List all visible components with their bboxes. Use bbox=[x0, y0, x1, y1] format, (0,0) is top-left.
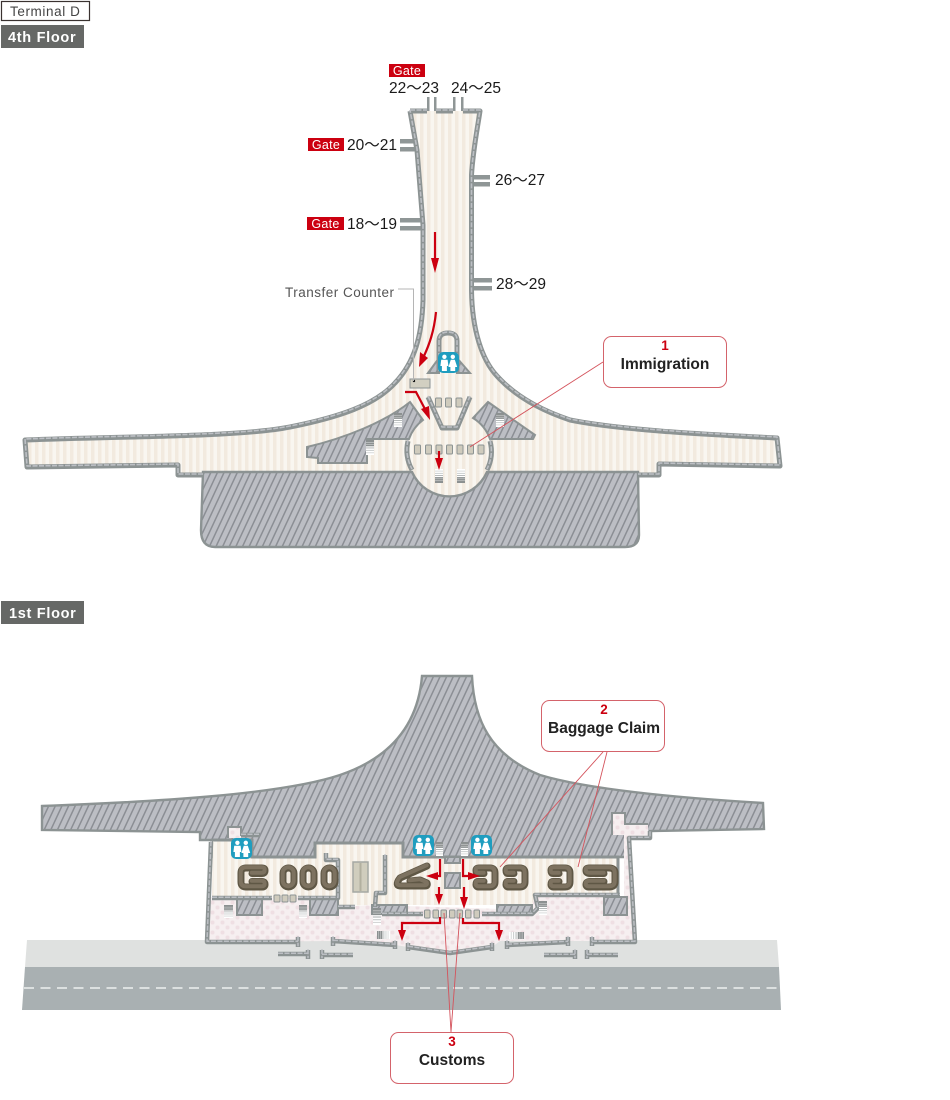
arrow bbox=[419, 312, 436, 367]
arrow bbox=[463, 859, 480, 880]
callout: baggage claim: 2 bbox=[600, 702, 608, 717]
terminal label: Terminal D bbox=[10, 4, 81, 19]
gate label 18-19: Gate bbox=[311, 217, 340, 231]
icon: restroom bbox=[231, 838, 252, 859]
arrivals hall bbox=[207, 838, 636, 955]
terminal label bbox=[2, 2, 90, 20]
concourse floor bbox=[25, 111, 780, 500]
stairs bbox=[366, 413, 504, 483]
transfer counter label: Transfer Counter bbox=[285, 285, 395, 300]
gate label 22-23: 22〜23 bbox=[389, 80, 439, 97]
callout: immigration bbox=[470, 336, 726, 447]
callout: customs bbox=[390, 913, 514, 1084]
hatched blocks bbox=[237, 857, 627, 915]
gate label 22-23: Gate bbox=[393, 64, 421, 78]
arrow bbox=[426, 859, 440, 880]
icon: restroom bbox=[471, 835, 492, 856]
transfer counter label bbox=[285, 285, 414, 381]
floor map: 4th floor bbox=[25, 97, 780, 547]
heading: 1st floor bbox=[1, 601, 84, 624]
baggage office bbox=[353, 862, 368, 892]
gate label 20-21 bbox=[308, 137, 397, 154]
hall top wall bbox=[213, 840, 618, 895]
booths bbox=[274, 895, 480, 918]
pink side room bbox=[228, 813, 648, 860]
callout: customs: 3 bbox=[448, 1034, 456, 1049]
callout: immigration: Immigration bbox=[621, 356, 709, 373]
icon: restroom bbox=[438, 352, 459, 373]
walls bbox=[25, 111, 780, 475]
road bbox=[22, 940, 781, 1010]
gate label 24-25: 24〜25 bbox=[451, 80, 501, 97]
arrow bbox=[405, 392, 430, 420]
floor map: 1st floor bbox=[42, 676, 764, 959]
arrow bbox=[460, 887, 468, 909]
gate label 28-29: 28〜29 bbox=[496, 276, 546, 293]
arrow bbox=[398, 917, 440, 941]
immigration booths bbox=[414, 398, 484, 454]
lower grey block bbox=[201, 472, 639, 547]
callout: immigration: 1 bbox=[661, 338, 669, 353]
hatched blocks bbox=[307, 358, 535, 463]
arrow bbox=[463, 918, 503, 941]
gate label 22-23 bbox=[389, 64, 439, 97]
baggage carousels bbox=[241, 865, 615, 887]
heading: 1st floor: 1st Floor bbox=[9, 606, 77, 622]
upper grey block bbox=[42, 676, 764, 857]
jet bridges bbox=[400, 97, 492, 290]
arrow bbox=[435, 451, 443, 470]
gate label 20-21: 20〜21 bbox=[347, 137, 397, 154]
gate label 20-21: Gate bbox=[312, 138, 340, 152]
transfer counter bbox=[410, 379, 430, 388]
gate label 18-19 bbox=[307, 216, 397, 233]
arrow bbox=[435, 887, 443, 905]
icon: restroom bbox=[413, 835, 434, 856]
gate label 18-19: 18〜19 bbox=[347, 216, 397, 233]
pink room outline bbox=[228, 813, 648, 838]
stairs bbox=[224, 842, 547, 939]
arrow bbox=[431, 232, 439, 273]
gate label 26-27: 26〜27 bbox=[495, 172, 545, 189]
heading: 4th floor: 4th Floor bbox=[8, 30, 76, 46]
walls bbox=[207, 831, 650, 959]
heading: 4th floor bbox=[1, 25, 84, 48]
callout: baggage claim bbox=[500, 700, 664, 867]
callout: customs: Customs bbox=[419, 1052, 485, 1069]
callout: baggage claim: Baggage Claim bbox=[548, 720, 660, 737]
baggage hall bbox=[212, 840, 618, 906]
